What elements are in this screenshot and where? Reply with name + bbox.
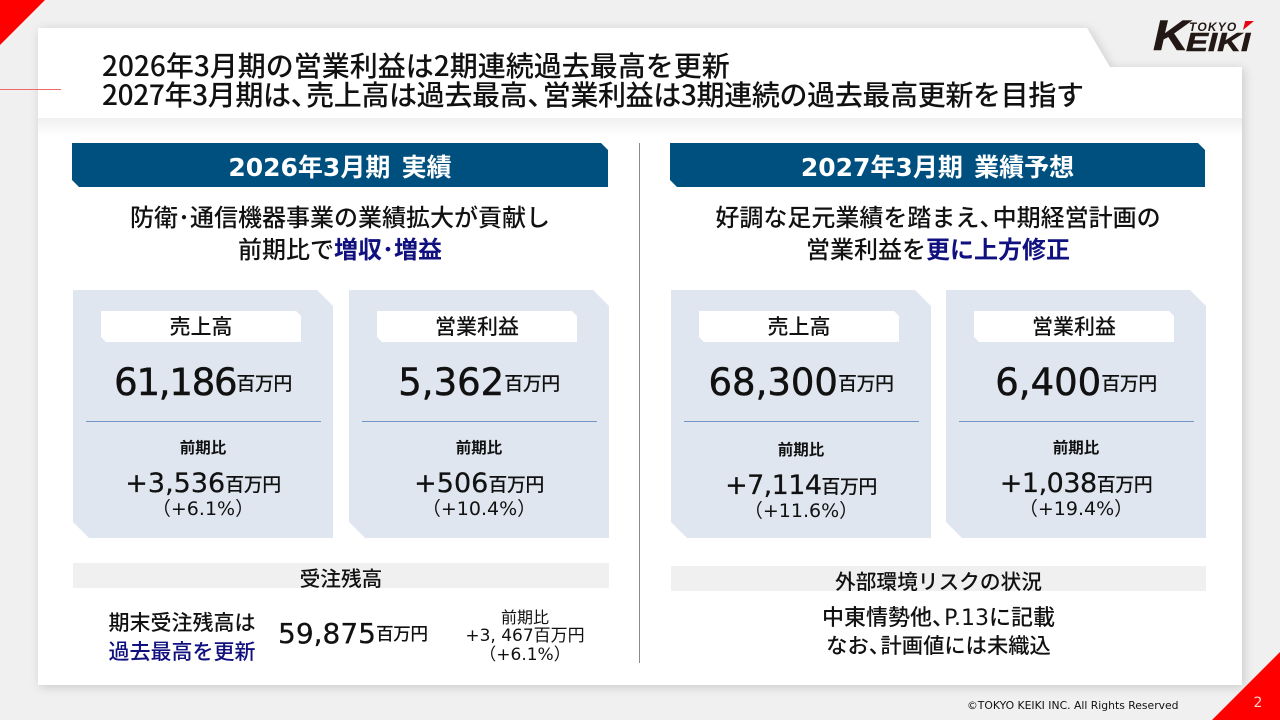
left column heading: 2026年3月期 実績 [228, 148, 452, 184]
value: 61,186百万円 [114, 361, 292, 404]
right column message [715, 198, 1161, 265]
right column heading [670, 143, 1205, 187]
label [699, 311, 899, 342]
right column message: 好調な足元業績を踏まえ、中期経営計画の [715, 198, 1161, 233]
logo: Tokyo Keiki [1153, 12, 1254, 60]
page number: 2 [1254, 695, 1262, 711]
label [377, 311, 577, 342]
title: 2027年3月期は、売上高は過去最高、営業利益は3期連続の過去最高更新を目指す [102, 74, 1084, 114]
card: 2026 net sales [73, 290, 333, 538]
top-left red corner triangle [0, 0, 45, 45]
right column message: 営業利益を更に上方修正 [806, 230, 1070, 265]
yoy label: 前期比 [778, 438, 824, 460]
yoy label: 前期比 [456, 436, 502, 458]
left column message [130, 198, 550, 265]
left column message: 防衛･通信機器事業の業績拡大が貢献し [130, 198, 550, 233]
logo: Tokyo Keiki: EIKI [1186, 27, 1250, 57]
label: 売上高 [768, 311, 830, 341]
logo: Tokyo Keiki: K [1153, 12, 1189, 60]
order backlog message: 期末受注残高は [108, 607, 256, 637]
order backlog message: 過去最高を更新 [108, 636, 256, 666]
card: 2026 operating profit [349, 290, 609, 538]
yoy label: 前期比 [180, 436, 226, 458]
external risk heading [671, 566, 1206, 591]
value: 6,400百万円 [995, 361, 1157, 404]
yoy percent: （+10.4%） [422, 494, 536, 521]
external risk text: なお、計画値には未織込 [826, 629, 1051, 660]
yoy percent: （+11.6%） [744, 496, 858, 523]
left column message: 前期比で増収･増益 [238, 230, 442, 265]
order backlog yoy: （+6.1%） [479, 640, 571, 665]
order backlog yoy [465, 604, 585, 665]
yoy label: 前期比 [1053, 436, 1099, 458]
card: 2027 net sales [671, 290, 931, 538]
external risk text: 中東情勢他、P.13に記載 [822, 600, 1055, 632]
label: 売上高 [170, 311, 232, 341]
external risk heading: 外部環境リスクの状況 [835, 565, 1042, 595]
yoy percent: （+19.4%） [1019, 494, 1133, 521]
value: 68,300百万円 [708, 361, 893, 404]
label: 営業利益 [435, 311, 519, 341]
left column heading [72, 143, 608, 187]
bottom-right red corner triangle [1212, 652, 1280, 720]
yoy value: +7,114百万円 [725, 470, 877, 501]
centre divider [639, 143, 640, 663]
red accent line beside title [0, 89, 61, 90]
value: 5,362百万円 [398, 361, 560, 404]
yoy value: +506百万円 [414, 468, 544, 499]
order backlog yoy: +3, 467百万円 [465, 621, 585, 646]
order backlog value: 59,875百万円 [278, 617, 428, 650]
yoy percent: （+6.1%） [152, 494, 254, 521]
order backlog message [108, 607, 256, 666]
copyright: ©TOKYO KEIKI INC. All Rights Reserved [967, 699, 1179, 712]
order backlog heading: 受注残高 [300, 562, 382, 592]
yoy value: +1,038百万円 [1000, 468, 1152, 499]
order backlog yoy: 前期比 [501, 604, 549, 628]
title: 2026年3月期の営業利益は2期連続過去最高を更新 [102, 45, 730, 85]
label: 営業利益 [1032, 311, 1116, 341]
right column heading: 2027年3月期 業績予想 [801, 148, 1074, 184]
yoy value: +3,536百万円 [125, 468, 281, 499]
title [102, 45, 1084, 114]
card: 2027 operating profit [946, 290, 1206, 538]
external risk text [822, 600, 1055, 660]
label [974, 311, 1174, 342]
label [101, 311, 301, 342]
logo: Tokyo Keiki: TOKYO [1189, 20, 1237, 34]
order backlog heading [73, 563, 609, 588]
